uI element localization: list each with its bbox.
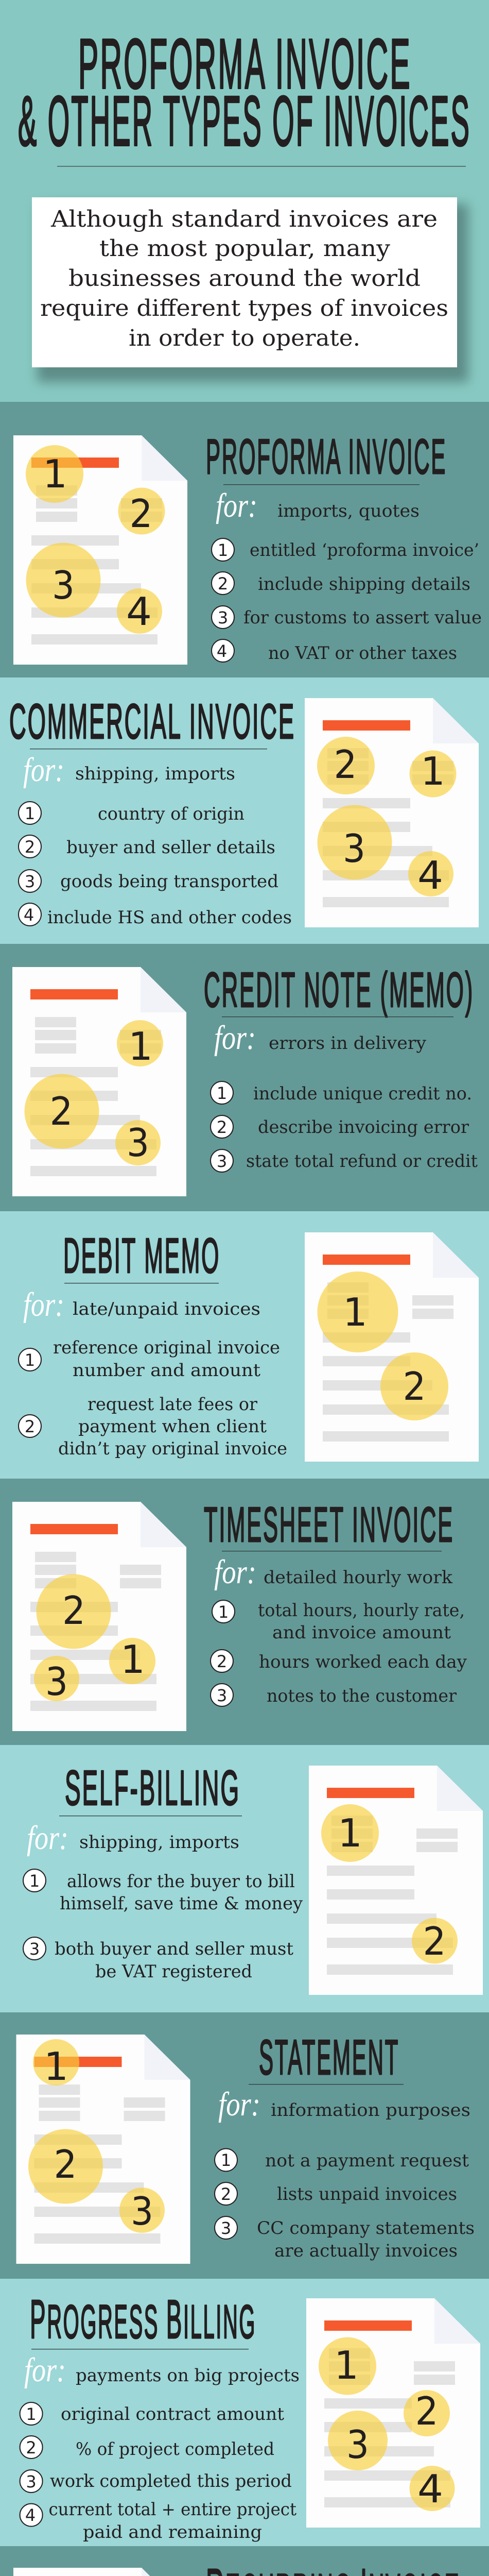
panel: commercial invoice [0, 677, 489, 944]
numbered list: 4 [25, 2505, 36, 2525]
icon: annotated invoice: 1 [44, 2044, 68, 2089]
icon: annotated invoice: 2 [415, 2388, 439, 2434]
icon: annotated invoice: 2 [54, 2142, 77, 2187]
numbered list: paid and remaining [83, 2522, 262, 2543]
icon: annotated invoice: 1 [338, 1810, 362, 1856]
for label: imports, quotes [277, 501, 420, 521]
numbered list: 1 [25, 804, 35, 823]
for label [216, 487, 420, 524]
numbered list: 3 [26, 2472, 37, 2492]
for label: for: [218, 2086, 260, 2123]
for label [27, 1819, 239, 1857]
numbered list: buyer and seller details [66, 837, 275, 858]
numbered list: request late fees or [88, 1394, 258, 1415]
for label [23, 751, 235, 789]
numbered list: 1 [218, 1602, 229, 1622]
intro text box: in order to operate. [129, 325, 360, 351]
numbered list: lists unpaid invoices [277, 2184, 457, 2205]
for label: for: [214, 1553, 256, 1591]
numbered list: 2 [221, 2184, 231, 2204]
icon: annotated invoice: 3 [52, 563, 75, 608]
numbered list: 2 [217, 1652, 227, 1671]
icon: annotated invoice [13, 435, 187, 665]
numbered list: 4 [24, 905, 34, 925]
for label [214, 1553, 452, 1591]
icon: annotated invoice [309, 1766, 483, 1995]
numbered list: number and amount [73, 1360, 260, 1381]
numbered list: and invoice amount [272, 1622, 451, 1643]
for label: for: [23, 1286, 64, 1324]
icon: annotated invoice: 2 [130, 491, 152, 536]
icon: annotated invoice: 3 [127, 1120, 149, 1165]
for label: information purposes [271, 2100, 470, 2121]
numbered list: are actually invoices [274, 2241, 458, 2261]
icon: annotated invoice: 2 [49, 1089, 73, 1134]
for label: for: [23, 751, 64, 789]
icon: annotated invoice: 2 [423, 1919, 446, 1964]
numbered list: 1 [218, 540, 228, 560]
numbered list: 3 [217, 1686, 227, 1705]
icon: annotated invoice: 1 [128, 1024, 153, 1069]
icon: annotated invoice: 1 [421, 749, 445, 794]
for label [24, 2351, 300, 2389]
numbered list: notes to the customer [267, 1686, 457, 1706]
for label: for: [24, 2351, 66, 2389]
icon: annotated invoice [12, 1502, 186, 1731]
numbered list: allows for the buyer to bill [67, 1871, 295, 1892]
icon: annotated invoice [305, 698, 479, 927]
numbered list: 1 [25, 1350, 35, 1370]
numbered list: hours worked each day [259, 1652, 467, 1672]
panel: debit memo: DEBIT MEMO [63, 1228, 220, 1283]
panel: statement [0, 2012, 489, 2279]
numbered list: 2 [217, 1117, 227, 1137]
numbered list: be VAT registered [95, 1961, 252, 1982]
numbered list [215, 2148, 475, 2261]
numbered list: 2 [26, 2438, 37, 2458]
numbered list: payment when client [78, 1416, 267, 1437]
numbered list: 2 [25, 837, 35, 857]
icon: annotated invoice [16, 2035, 190, 2264]
panel: progress billing [0, 2279, 489, 2546]
numbered list: include HS and other codes [47, 907, 292, 928]
numbered list: 4 [217, 641, 227, 661]
for label: late/unpaid invoices [73, 1299, 260, 1319]
for label: payments on big projects [76, 2365, 300, 2386]
panel: proforma invoice [0, 402, 489, 677]
icon: annotated invoice: 3 [131, 2189, 153, 2234]
numbered list: for customs to assert value [243, 607, 482, 628]
icon: annotated invoice: 1 [343, 1290, 368, 1335]
icon: annotated invoice: 1 [334, 2343, 359, 2388]
numbered list: total hours, hourly rate, [258, 1600, 465, 1621]
numbered list: 1 [29, 1871, 40, 1891]
numbered list: didn’t pay original invoice [58, 1438, 287, 1459]
numbered list [19, 802, 292, 928]
icon: annotated invoice: 2 [62, 1588, 85, 1633]
intro text box [32, 197, 468, 382]
icon: annotated invoice: 4 [417, 853, 443, 898]
icon: annotated invoice: 2 [403, 1364, 426, 1409]
numbered list [211, 1600, 467, 1706]
icon: annotated invoice [13, 2568, 187, 2576]
numbered list: original contract amount [61, 2404, 284, 2425]
panel: credit note [0, 944, 489, 1211]
icon: annotated invoice: 1 [43, 451, 67, 497]
icon: annotated invoice: 1 [120, 1637, 145, 1682]
numbered list: country of origin [98, 804, 244, 824]
numbered list: goods being transported [60, 871, 278, 892]
numbered list: 3 [217, 1151, 227, 1171]
icon: annotated invoice: 3 [343, 826, 365, 871]
icon: annotated invoice [306, 2298, 480, 2528]
numbered list: himself, save time & money [60, 1893, 303, 1914]
numbered list: include shipping details [258, 574, 470, 595]
icon: annotated invoice: 2 [334, 742, 357, 787]
numbered list: state total refund or credit [246, 1151, 478, 1172]
numbered list: 2 [218, 574, 228, 594]
intro text box: require different types of invoices [40, 295, 448, 321]
numbered list: both buyer and seller must [55, 1939, 293, 1959]
numbered list [212, 538, 482, 664]
panel: debit memo [0, 1211, 489, 1479]
icon: annotated invoice: 4 [126, 589, 152, 634]
numbered list [20, 2402, 296, 2543]
numbered list: describe invoicing error [258, 1117, 469, 1138]
numbered list: 1 [221, 2150, 231, 2170]
numbered list: 1 [26, 2404, 37, 2424]
for label: for: [214, 1019, 256, 1057]
for label: errors in delivery [269, 1033, 427, 1054]
intro text box: businesses around the world [68, 265, 421, 292]
icon: annotated invoice: 3 [346, 2422, 369, 2467]
panel: recurring invoice [0, 2546, 489, 2576]
for label: shipping, imports [79, 1832, 239, 1853]
icon: annotated invoice: 3 [45, 1659, 68, 1704]
icon: annotated invoice [12, 967, 186, 1196]
numbered list: work completed this period [50, 2471, 292, 2492]
numbered list: 1 [217, 1083, 227, 1103]
title [18, 25, 471, 161]
numbered list [211, 1081, 478, 1172]
numbered list: 2 [25, 1417, 35, 1436]
intro text box: Although standard invoices are [50, 206, 438, 232]
for label [218, 2086, 470, 2123]
numbered list: 3 [218, 608, 228, 628]
numbered list: reference original invoice [53, 1337, 280, 1358]
numbered list: 3 [221, 2218, 231, 2238]
panel: self-billing [0, 1745, 489, 2012]
for label: detailed hourly work [264, 1567, 452, 1588]
for label: for: [216, 487, 257, 524]
for label [214, 1019, 427, 1057]
numbered list: CC company statements [257, 2218, 475, 2239]
numbered list [23, 1869, 303, 1982]
intro text box: the most popular, many [99, 235, 390, 262]
numbered list: current total + entire project [48, 2499, 296, 2520]
panel: header [0, 0, 489, 402]
panel: self-billing: SELF-BILLING [65, 1760, 240, 1816]
numbered list: no VAT or other taxes [268, 643, 457, 664]
heading: PROGRESS BILLING [30, 2289, 256, 2350]
numbered list [19, 1337, 287, 1459]
numbered list: entitled ‘proforma invoice’ [250, 540, 479, 561]
for label: shipping, imports [75, 764, 235, 784]
numbered list: 3 [29, 1939, 40, 1959]
for label: for: [27, 1819, 68, 1857]
numbered list: not a payment request [265, 2150, 469, 2171]
icon: annotated invoice [305, 1232, 479, 1462]
panel: timesheet invoice [0, 1479, 489, 1745]
numbered list: % of project completed [76, 2439, 274, 2460]
icon: annotated invoice: 4 [417, 2466, 443, 2512]
for label [23, 1286, 260, 1324]
numbered list: 3 [25, 872, 35, 891]
numbered list: include unique credit no. [253, 1083, 472, 1104]
